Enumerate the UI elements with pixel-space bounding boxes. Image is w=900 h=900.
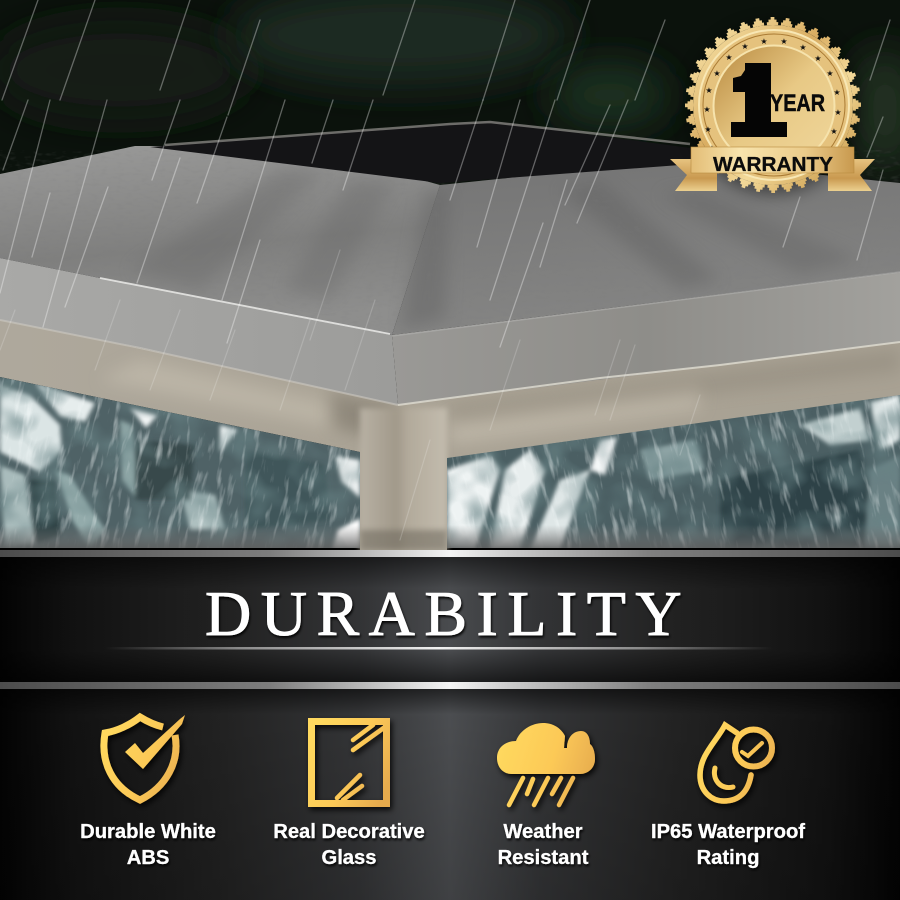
stars ring: ★ — [760, 37, 768, 46]
warranty badge — [670, 18, 875, 194]
ribbon band — [691, 147, 854, 173]
icon: rain cloud — [497, 723, 595, 805]
feature: durable white ABS — [80, 715, 216, 869]
stars ring: ★ — [833, 88, 841, 97]
stars ring: ★ — [826, 69, 834, 78]
badge drop shadow — [687, 22, 859, 194]
label: ip65 waterproof rating: IP65 Waterproof — [651, 821, 805, 843]
feature: real decorative glass — [273, 722, 425, 869]
post base fade — [360, 530, 447, 550]
solar panel — [150, 121, 705, 183]
stars ring — [703, 37, 842, 153]
stars ring: ★ — [780, 37, 788, 46]
label: durable white abs: Durable White — [80, 821, 216, 843]
feature: weather resistant — [497, 723, 595, 869]
label: real decorative glass: Glass — [322, 847, 376, 869]
top silver bar — [0, 550, 900, 557]
header vertical shading — [0, 557, 900, 682]
scalloped gold seal — [686, 18, 860, 192]
feature panel background — [0, 689, 900, 900]
big numeral 1 — [731, 63, 787, 137]
frame below the fascia — [0, 318, 900, 550]
label: durable white abs: ABS — [127, 847, 169, 869]
stars ring: ★ — [708, 144, 716, 153]
stars ring: ★ — [834, 108, 842, 117]
photo: rain-soaked solar post cap — [0, 0, 900, 550]
left ribbon tail — [670, 159, 717, 191]
right decorative glass — [447, 395, 900, 548]
centre post — [360, 408, 447, 550]
solar panel rim highlight — [165, 122, 690, 145]
seal rings — [699, 30, 849, 180]
WARRANTY label: WARRANTY — [713, 154, 834, 176]
panel: durability header band — [0, 550, 900, 689]
label: real decorative glass: Real Decorative — [273, 821, 425, 843]
stars ring: ★ — [799, 43, 807, 52]
left fascia band — [0, 258, 398, 405]
icon: shield with check — [104, 715, 185, 800]
stars ring: ★ — [705, 86, 713, 95]
stars ring: ★ — [830, 127, 838, 136]
dark foliage background — [0, 0, 900, 200]
stars ring: ★ — [814, 54, 822, 63]
frame shading and glow — [100, 348, 900, 445]
panel: feature icons — [0, 689, 900, 900]
roof surface water streaks — [0, 150, 900, 340]
title: DURABILITY — [205, 578, 691, 649]
stars ring: ★ — [713, 69, 721, 78]
label: weather resistant: Weather — [503, 821, 583, 843]
left decorative glass — [0, 377, 360, 548]
lower silver bar — [0, 682, 900, 689]
stars ring: ★ — [703, 105, 711, 114]
icon: glass pane — [312, 722, 386, 804]
stars ring: ★ — [725, 53, 733, 62]
right fascia band — [392, 272, 900, 405]
header background — [0, 557, 900, 682]
falling rain streaks — [0, 0, 890, 540]
title underline — [105, 647, 773, 650]
YEAR label: YEAR — [770, 90, 825, 117]
label: ip65 waterproof rating: Rating — [697, 847, 759, 869]
roof edge highlights — [0, 272, 900, 405]
cap right roof face — [392, 160, 900, 335]
right ribbon tail — [828, 159, 875, 191]
feature panel shading — [0, 689, 900, 900]
stars ring: ★ — [704, 125, 712, 134]
icon: water drop with check — [700, 725, 772, 801]
feature: IP65 waterproof rating — [651, 725, 805, 869]
label: weather resistant: Resistant — [498, 847, 589, 869]
seal inner disc — [714, 46, 834, 166]
stars ring: ★ — [741, 42, 749, 51]
cap left roof face — [0, 146, 440, 335]
